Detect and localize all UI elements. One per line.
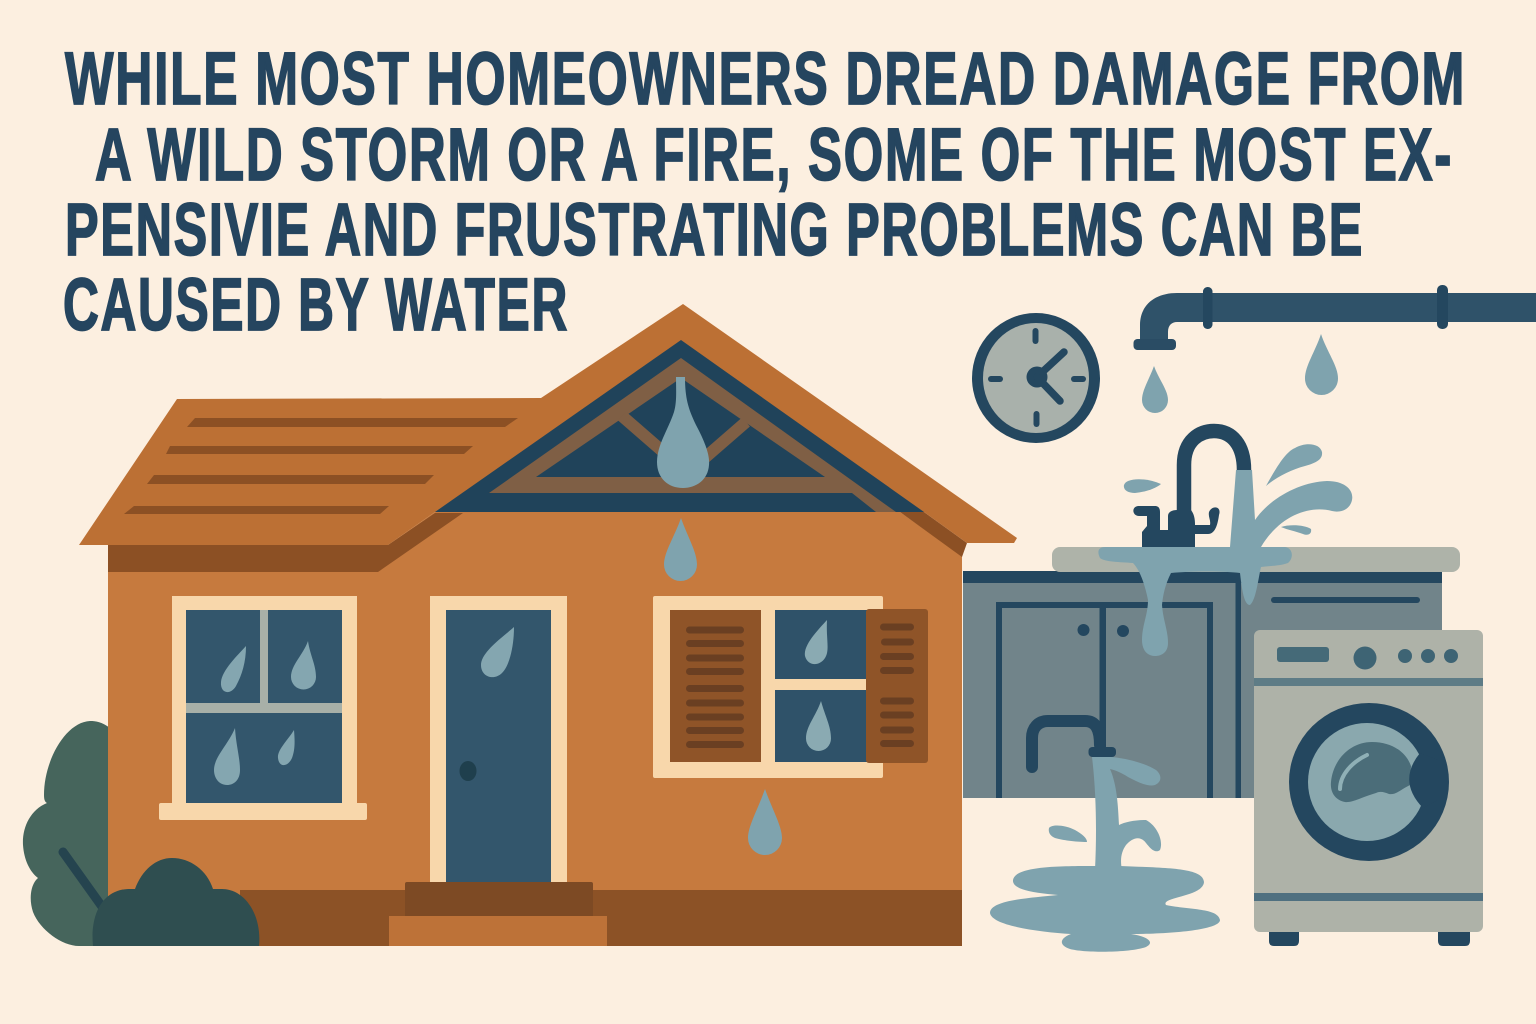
wall clock: [972, 313, 1100, 443]
roof: [79, 304, 1017, 545]
water drop under gable: [664, 518, 697, 581]
leaking pipe: [1134, 285, 1536, 350]
left window: [159, 596, 367, 820]
kitchen cabinets: [963, 571, 1442, 798]
right eave shadow: [900, 512, 967, 557]
cabinet doors: [996, 583, 1420, 798]
washer door: [1289, 703, 1449, 861]
title: CAUSED BY WATER: [63, 263, 569, 346]
floor water puddle and splashes: [990, 757, 1220, 952]
lower leaking faucet: [1032, 721, 1116, 767]
washer feet: [1269, 932, 1470, 946]
right window: [653, 596, 928, 778]
roof shingles: [124, 418, 518, 514]
countertop: [1052, 547, 1460, 572]
front bush: [93, 858, 259, 946]
left shutter: [670, 610, 761, 762]
door: [430, 596, 567, 886]
left eave shadow: [108, 513, 463, 572]
title: [63, 37, 1466, 346]
house: [79, 304, 1017, 946]
right shutter: [866, 609, 928, 763]
back bush: [23, 721, 110, 946]
kitchen faucet: [1133, 431, 1244, 547]
overflowing water: [1098, 444, 1352, 656]
pipe water drops: [1142, 334, 1338, 413]
foundation band: [240, 890, 962, 946]
house wall: [108, 512, 962, 946]
water drop under window: [748, 789, 782, 855]
door steps: [389, 882, 607, 946]
large gable water drop: [657, 377, 709, 488]
gable: [435, 340, 924, 512]
washing machine: [1254, 630, 1483, 946]
